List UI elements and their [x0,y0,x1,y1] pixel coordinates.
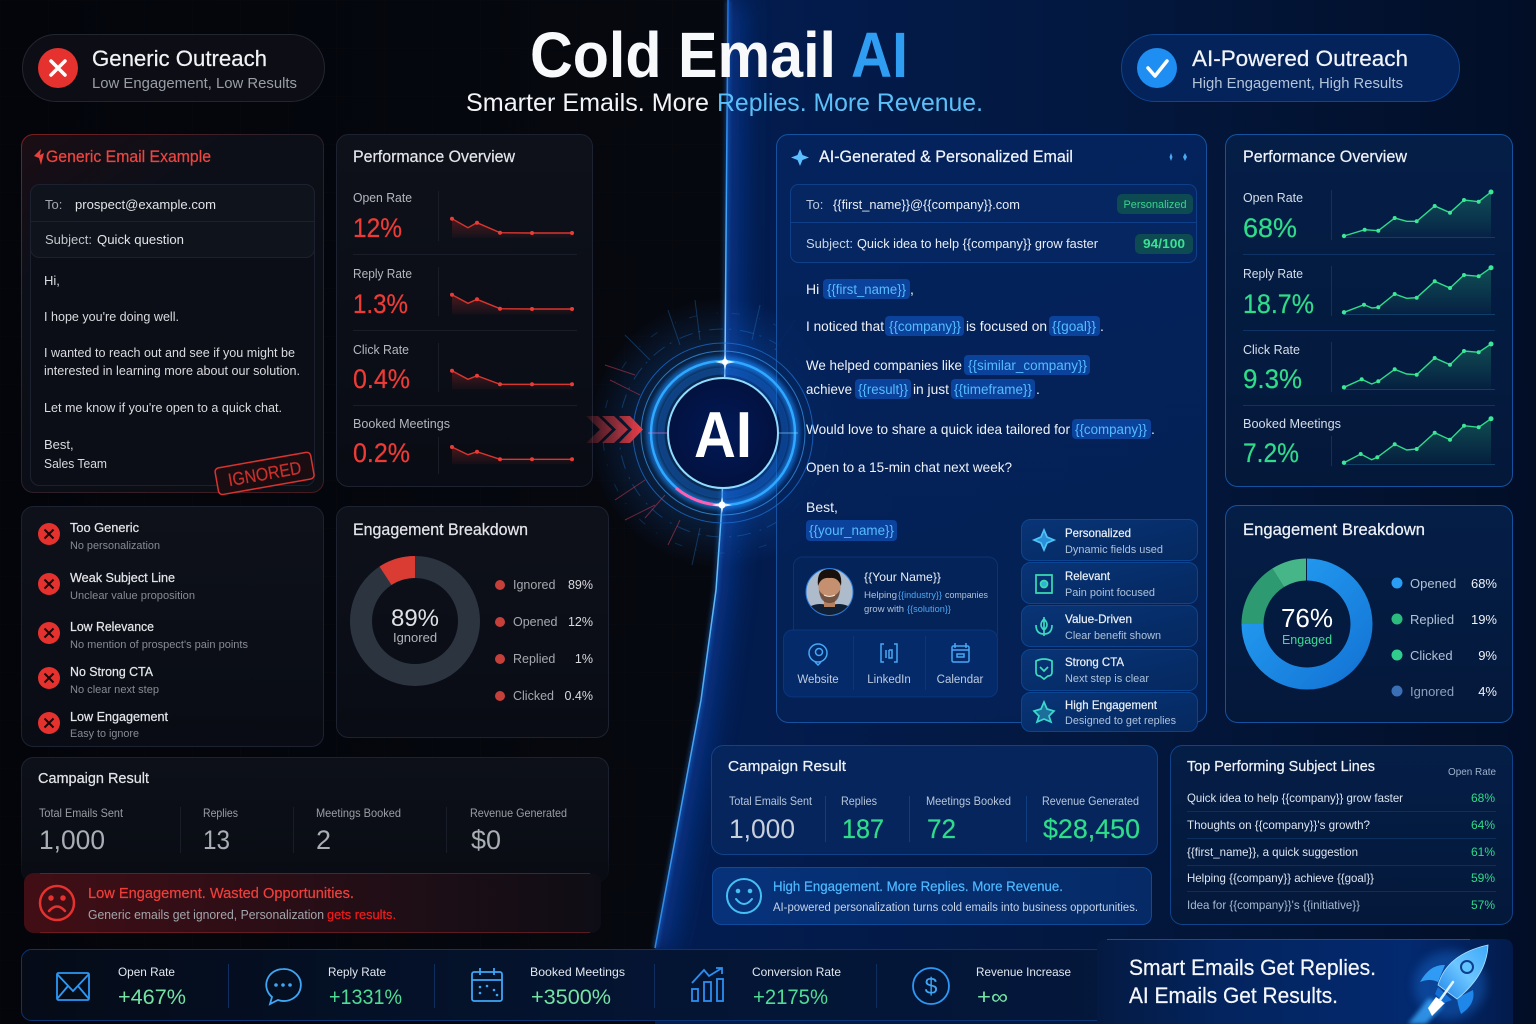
metric: conversion rate uplift: Conversion Rate [752,965,841,979]
icon: smile [727,879,761,913]
panel: top performing subject lines: 64% [1471,818,1495,832]
panel: performance overview right: Performance Overview [1243,148,1407,166]
item: low engagement: Low Engagement [70,710,169,724]
metric: conversion rate uplift: +2175% [753,986,828,1009]
icon: linkedin [881,644,897,662]
email header: Subject: [806,236,853,251]
item: too generic [38,521,160,552]
item: too generic: No personalization [70,540,160,552]
panel: top performing subject lines: Idea for {{company}}'s {{initiative}} [1187,898,1360,912]
email body with merge fields: {{company}} [889,319,961,334]
panel: engagement breakdown left [336,506,608,738]
bottom metrics bar [22,950,1512,1020]
panel: campaign result right: 72 [927,814,956,844]
icon: sad face [40,886,74,920]
panel: campaign result left: 2 [316,825,331,855]
arrow: red chevrons [586,416,643,443]
panel: top performing subject lines: 59% [1471,871,1495,885]
metric: click rate: 0.4% [353,364,410,394]
title: Cold Email [530,19,836,91]
signature card: {{industry}} [898,590,942,601]
panel: top performing subject lines: Quick idea to help {{company}} grow faster [1187,791,1403,805]
item: no strong cta [38,665,159,696]
panel: campaign result right: Total Emails Sent [729,794,813,808]
item: low relevance: No mention of prospect's pain points [70,639,248,651]
metric: reply rate [1243,265,1495,319]
callout: low engagement: Low Engagement. Wasted Opportunities. [88,885,354,902]
metric: open rate uplift [57,965,186,1009]
panel: campaign result left: 13 [203,825,230,855]
links card: LinkedIn [867,674,911,686]
icon: red spark [34,149,44,165]
panel: AI generated email [776,134,1206,722]
metric: click rate: Click Rate [1243,342,1300,357]
signature card: Helping [864,590,897,601]
panel: campaign result left: 1,000 [39,825,105,855]
panel: campaign result right: $28,450 [1043,814,1140,844]
icon: plant [1036,617,1052,636]
card: relevant: Relevant [1065,569,1111,583]
donut chart: Ignored [393,630,437,645]
legend: Replied [1410,612,1454,627]
metric: reply rate: 1.3% [353,289,408,319]
signature card: companies [945,590,988,601]
panel: campaign result left: Revenue Generated [470,806,567,820]
email body with merge fields: . [1151,421,1155,437]
badge: AI powered outreach [1122,34,1460,102]
legend: 9% [1478,648,1497,663]
email body: Hi, [44,273,60,288]
legend: 68% [1471,576,1497,591]
legend: 19% [1471,612,1497,627]
panel: AI generated email: AI-Generated & Personalized Email [819,148,1073,166]
email body: Sales Team [44,456,107,471]
metric: revenue uplift [913,965,1071,1009]
panel: performance overview left: Performance Overview [353,148,515,166]
panel: campaign result left: $0 [471,825,501,855]
card: relevant [1022,562,1198,604]
card: value-driven [1022,606,1198,646]
panel: top performing subject lines: Thoughts on {{company}}'s growth? [1187,818,1370,832]
donut chart [1242,558,1372,690]
panel: weaknesses list [22,506,324,746]
signature card: {{Your Name}} [864,570,941,584]
sparkle highlights [712,354,735,513]
metric: revenue uplift: Revenue Increase [976,965,1071,979]
panel: top performing subject lines: 57% [1471,898,1495,912]
background: dark left and blue right split [650,0,1536,1024]
legend [1392,576,1497,699]
email body with merge fields: Hi [806,281,819,297]
item: no strong cta: No Strong CTA [70,665,154,679]
email body with merge fields: . [1100,318,1104,334]
email header: Quick idea to help {{company}} grow faster [857,236,1099,251]
icon: envelope [57,973,89,1000]
legend: 89% [568,578,593,592]
email body [44,273,300,471]
metric: reply rate: Reply Rate [353,266,412,281]
panel: campaign result right [712,746,1158,854]
metric: booked meetings uplift [472,965,625,1009]
item: no strong cta: No clear next step [70,684,159,696]
metric: click rate [353,342,574,394]
panel: campaign result left: Campaign Result [38,770,150,787]
email body: I hope you're doing well. [44,309,179,324]
item: too generic: Too Generic [70,521,139,535]
panel: top performing subject lines: Top Performing Subject Lines [1187,759,1375,775]
panel: campaign result right: Revenue Generated [1042,794,1139,808]
email body with merge fields: {{first_name}} [827,282,906,297]
panel: campaign result left: Meetings Booked [316,806,401,820]
legend: 0.4% [564,689,593,703]
card: strong CTA [1022,650,1198,690]
callout: low engagement: Generic emails get ignored, Personalization [88,908,324,922]
email body with merge fields: {{timeframe}} [954,382,1032,397]
metric: open rate: Open Rate [353,190,412,205]
metric: reply rate: 18.7% [1243,289,1314,319]
metric: open rate [353,190,574,243]
card: value-driven: Value-Driven [1065,612,1132,626]
legend: Clicked [1410,648,1453,663]
card: relevant: Pain point focused [1065,587,1155,599]
metric: conversion rate uplift [692,965,841,1009]
panel: campaign result right: 1,000 [729,814,795,844]
title: Replies. More Revenue. [717,89,983,117]
icon: chat shield [1036,659,1052,679]
card: value-driven: Clear benefit shown [1065,630,1161,642]
email body with merge fields: Open to a 15-min chat next week? [806,459,1012,475]
email header [30,184,314,258]
panel: top performing subject lines: 61% [1471,845,1495,859]
legend: Ignored [513,578,555,592]
email body with merge fields: We helped companies like [806,357,962,373]
legend [495,578,593,703]
email body: I wanted to reach out and see if you might be [44,345,295,360]
signature card [794,557,998,642]
card: strong CTA: Next step is clear [1065,673,1149,685]
panel: campaign result right: 187 [842,814,884,844]
email body with merge fields: achieve [806,381,852,397]
metric: open rate: Open Rate [1243,190,1303,205]
panel: engagement breakdown right [1226,506,1512,722]
item: low engagement: Easy to ignore [70,728,139,740]
stamp: ignored: IGNORED [226,458,303,490]
metric: booked meetings: Booked Meetings [353,416,450,431]
icon: chat bubble [266,969,301,1004]
legend: 12% [568,615,593,629]
metric: click rate [1243,342,1495,394]
metric: booked meetings [1243,416,1495,468]
item: weak subject line: Unclear value proposition [70,590,195,602]
legend: Replied [513,652,555,666]
metric: reply rate [353,266,574,319]
email body with merge fields: {{result}} [858,382,908,397]
icon: dollar coin [913,968,949,1004]
email header: To: [806,197,823,212]
email header: 94/100 [1143,237,1185,251]
email body with merge fields: , [910,281,914,297]
email body with merge fields: is focused on [966,318,1047,334]
panel: campaign result left [22,758,608,882]
icon: sparkle [791,149,809,166]
icon: star sparkle [1034,530,1054,550]
card: personalized: Dynamic fields used [1065,544,1163,556]
email body: Best, [44,437,74,452]
links card: Website [797,674,839,686]
panel: performance overview right [1226,134,1512,486]
metric: open rate: 12% [353,213,402,243]
metric: revenue uplift: +∞ [977,986,1008,1009]
email header [790,184,1196,262]
item: low relevance [38,620,248,651]
donut chart: 76% [1281,603,1333,633]
email header: Personalized [1124,199,1186,211]
card: high engagement: High Engagement [1065,698,1158,712]
panel: generic email example: Generic Email Example [46,148,211,166]
email body: interested in learning more about our solution. [44,363,300,378]
badge: AI powered outreach: AI-Powered Outreach [1192,46,1408,71]
card: high engagement: Designed to get replies [1065,715,1176,727]
icon: star [1034,702,1054,722]
panel: campaign result right: Meetings Booked [926,794,1011,808]
metric: booked meetings uplift: Booked Meetings [530,965,625,979]
panel: closing message [1097,939,1513,1024]
metric: booked meetings uplift: +3500% [531,986,611,1009]
email body with merge fields: . [1036,381,1040,397]
email header: Quick question [97,232,184,247]
legend: Clicked [513,689,554,703]
metric: reply rate uplift: +1331% [329,986,402,1009]
legend: Opened [513,615,558,629]
legend: Opened [1410,576,1456,591]
title [466,19,983,117]
panel: campaign result right: Campaign Result [728,758,847,775]
panel: closing message: Smart Emails Get Replies. [1129,955,1376,980]
email body with merge fields: {{your_name}} [809,523,894,538]
panel: closing message: AI Emails Get Results. [1129,983,1338,1008]
panel: top performing subject lines [1170,746,1512,924]
panel: performance overview left [336,134,592,486]
metric: booked meetings [353,416,574,468]
title: Smarter Emails. More [466,89,709,117]
panel: top performing subject lines: {{first_name}}, a quick suggestion [1187,845,1358,859]
badge: AI powered outreach: High Engagement, High Results [1192,75,1403,92]
donut chart: 89% [391,605,439,632]
card: personalized: Personalized [1065,526,1131,540]
signature card: grow with [864,604,904,615]
title: AI [851,19,908,91]
email header: To: [45,197,62,212]
avatar portrait [806,568,853,616]
email body with merge fields: Best, [806,499,838,515]
panel: top performing subject lines: Open Rate [1448,766,1496,778]
item: low engagement [38,710,169,740]
item: low relevance: Low Relevance [70,620,154,634]
AI emblem outer glow and rays [588,298,858,568]
badge: generic outreach: Low Engagement, Low Results [92,75,297,92]
panel: generic email example [22,134,324,495]
metric: open rate uplift: Open Rate [118,965,175,979]
links card [784,630,998,697]
icon: blue check [1137,48,1177,88]
callout: low engagement: gets results. [327,908,396,922]
metric: booked meetings: Booked Meetings [1243,416,1341,431]
panel: top performing subject lines: 68% [1471,791,1495,805]
callout: high engagement [712,868,1152,924]
AI core emblem: AI [694,398,752,471]
email header: prospect@example.com [75,197,216,212]
donut chart [361,556,469,675]
metric: open rate [1243,190,1495,243]
panel: engagement breakdown right: Engagement Breakdown [1243,521,1425,539]
metric: booked meetings: 7.2% [1243,438,1299,468]
email header: Subject: [45,232,92,247]
item: weak subject line: Weak Subject Line [70,571,175,585]
badge: generic outreach [22,34,324,102]
panel: campaign result right: Replies [841,794,877,808]
email body with merge fields: in just [913,381,949,397]
icon: calendar [472,968,502,1001]
callout: low engagement [24,873,601,933]
email body with merge fields: {{company}} [1075,422,1147,437]
links card: Calendar [937,674,984,686]
donut chart: Engaged [1282,633,1332,647]
metric: click rate: Click Rate [353,342,409,357]
stamp: ignored [214,452,315,495]
email body with merge fields: Would love to share a quick idea tailored for [806,421,1070,437]
card: high engagement [1022,692,1198,732]
panel: campaign result left: Total Emails Sent [39,806,124,820]
metric: open rate uplift: +467% [118,986,186,1009]
callout: high engagement: High Engagement. More Replies. More Revenue. [773,878,1063,894]
metric: booked meetings: 0.2% [353,438,410,468]
card: strong CTA: Strong CTA [1065,655,1124,669]
email body: Let me know if you're open to a quick chat. [44,400,282,415]
panel: top performing subject lines: Helping {{company}} achieve {{goal}} [1187,871,1374,885]
metric: reply rate: Reply Rate [1243,266,1303,281]
legend: 1% [575,652,593,666]
email body with merge fields: {{similar_company}} [968,358,1087,373]
icon: website [809,644,827,665]
item: weak subject line [38,571,195,602]
metric: click rate: 9.3% [1243,364,1302,394]
legend: 4% [1478,684,1497,699]
callout: high engagement: AI-powered personalization turns cold emails into business opportunities. [773,902,1138,914]
legend: Ignored [1410,684,1454,699]
email body with merge fields: I noticed that [806,318,884,334]
signature card: {{solution}} [907,604,951,615]
email body with merge fields [806,279,1155,541]
metric: reply rate uplift [266,965,402,1009]
icon: dollar coin: $ [925,973,938,999]
icon: target [1036,575,1052,593]
icon: red cross [38,48,78,88]
email body with merge fields: {{goal}} [1052,319,1096,334]
panel: campaign result left: Replies [203,806,238,820]
icon: rocket [1408,945,1488,1024]
icon: calendar [952,643,969,662]
metric: reply rate uplift: Reply Rate [328,965,386,979]
email header: {{first_name}}@{{company}}.com [833,197,1020,212]
badge: generic outreach: Generic Outreach [92,46,267,71]
metric: open rate: 68% [1243,213,1297,243]
icon: growth chart [692,968,723,1001]
AI core emblem [633,343,813,523]
panel: engagement breakdown left: Engagement Breakdown [353,521,528,539]
card: personalized [1022,520,1198,560]
